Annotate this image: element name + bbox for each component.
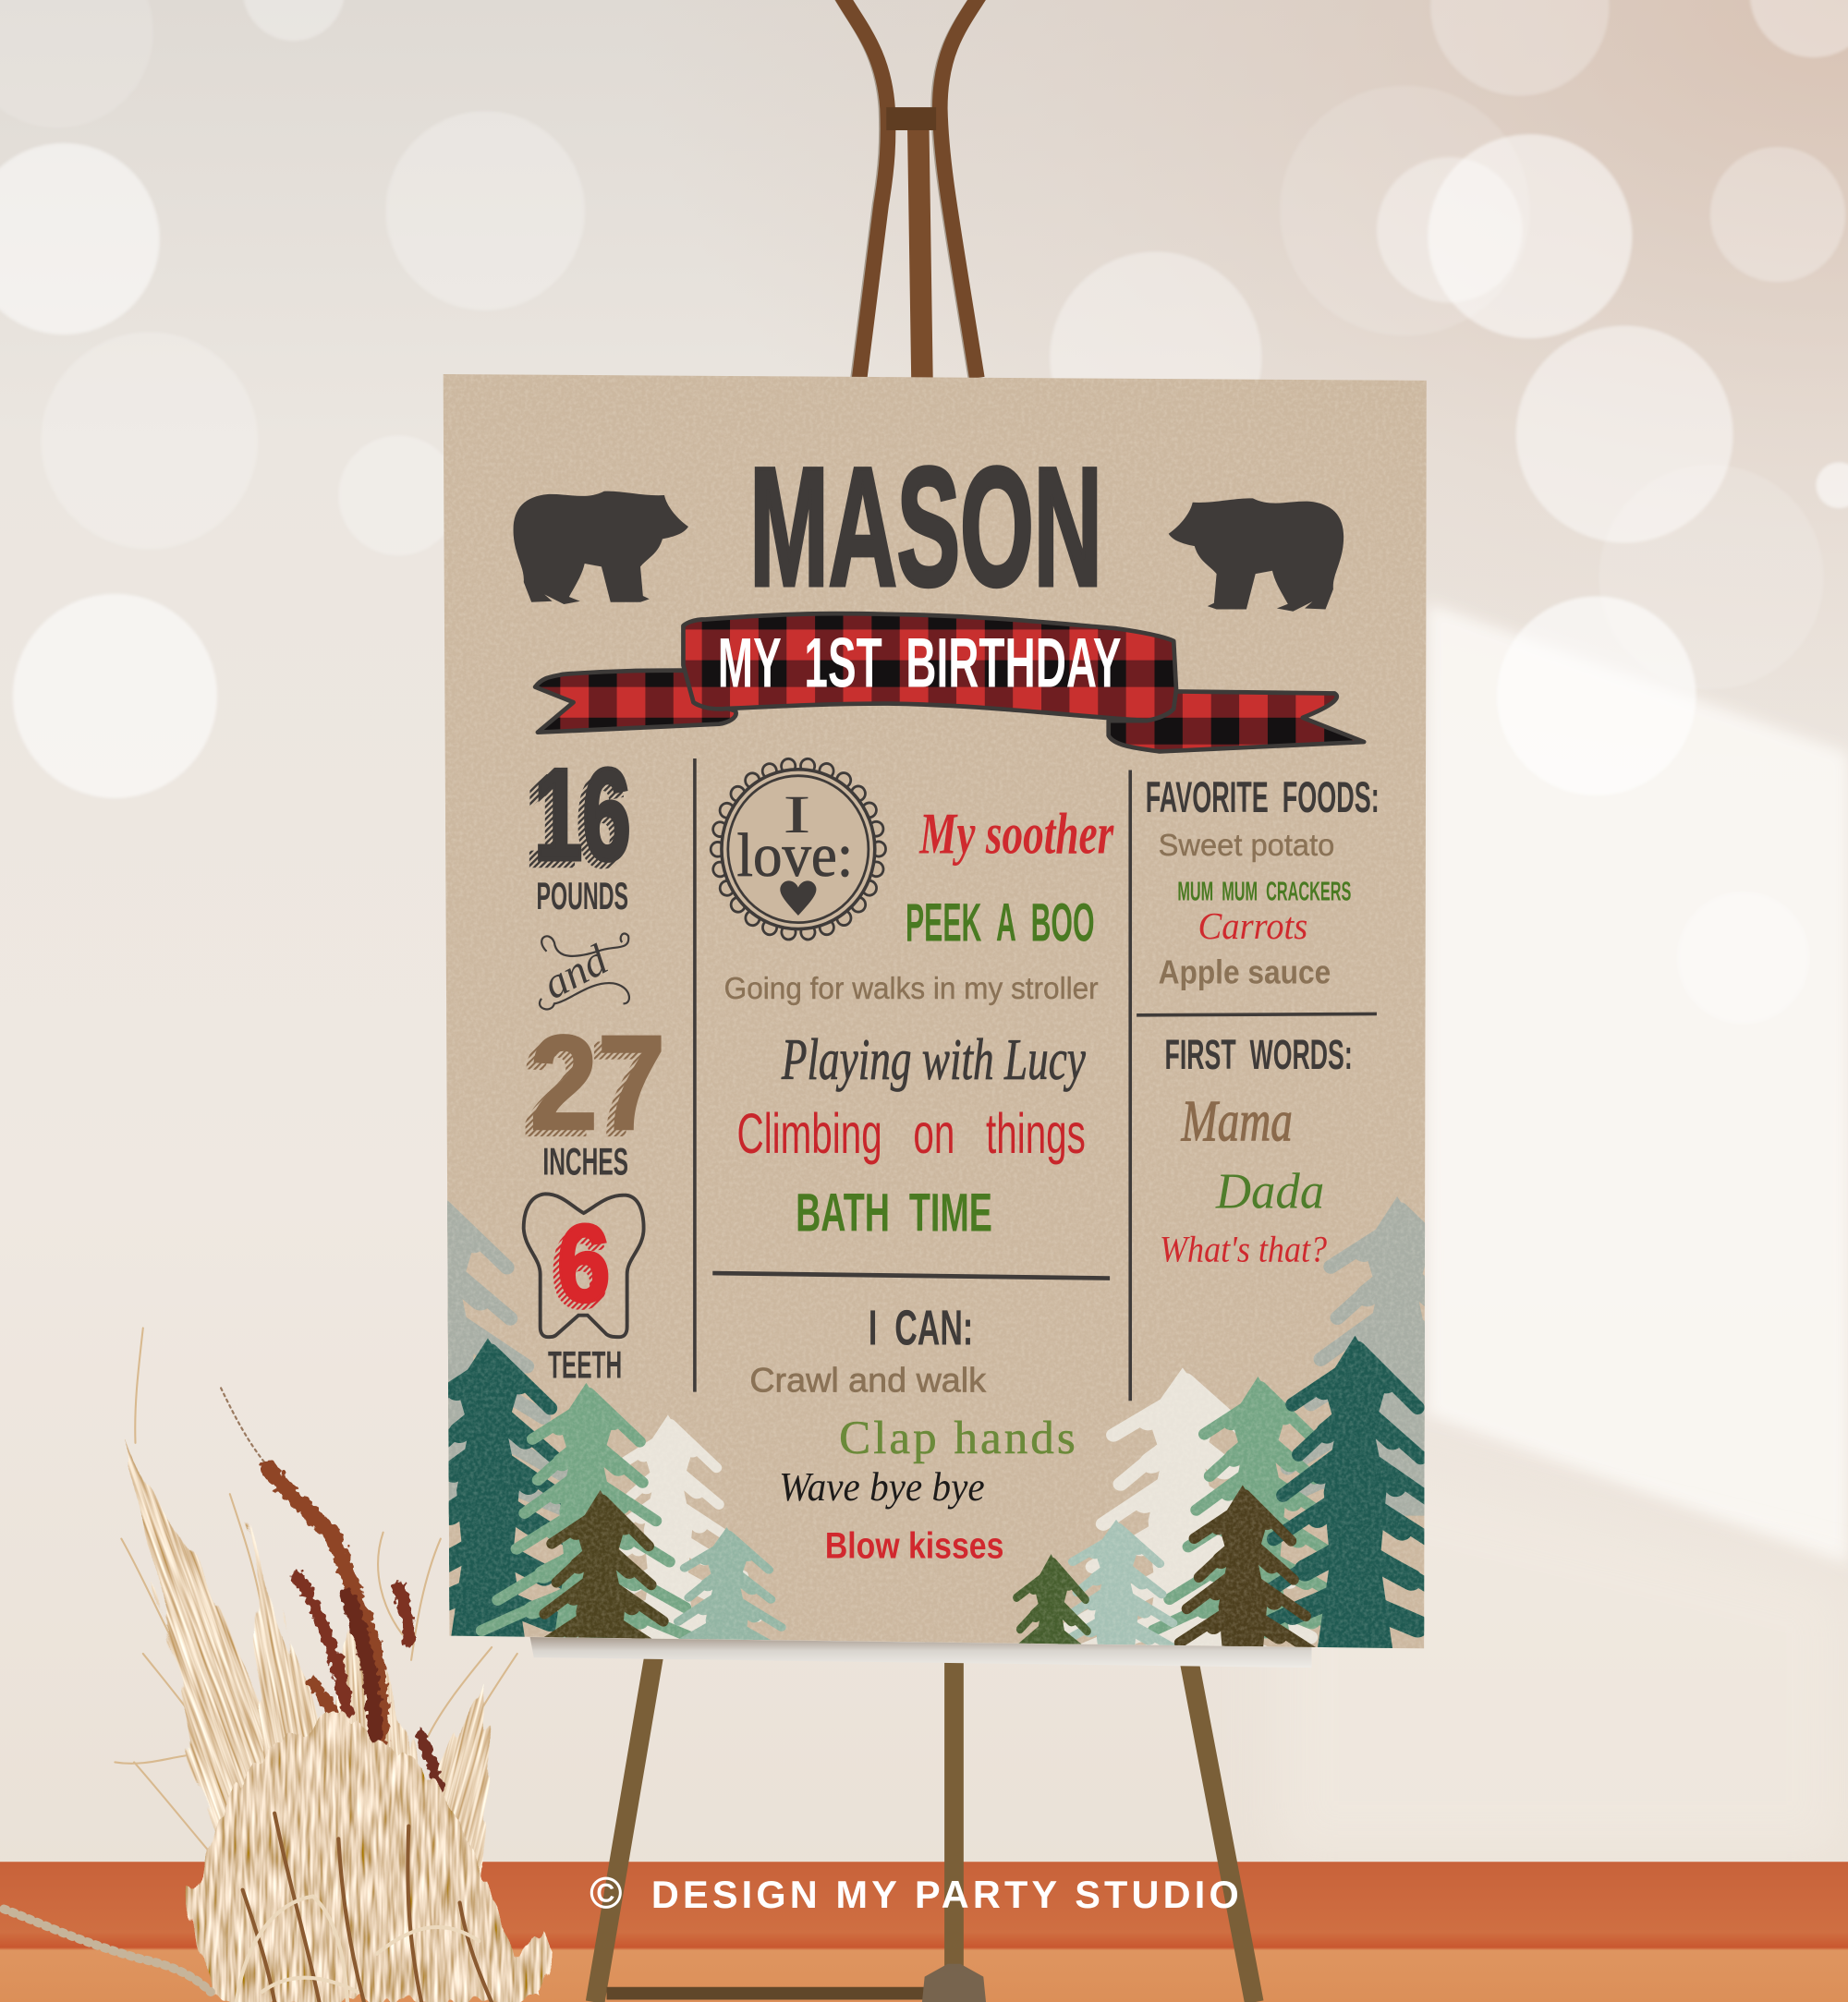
rust main spike <box>268 1469 381 1768</box>
pink glow on upper right wall <box>638 0 1848 792</box>
name title: MASON <box>749 432 1102 621</box>
bath time: BATH TIME <box>796 1183 992 1243</box>
curled leaves <box>237 1897 479 2002</box>
badge word love: love: <box>737 822 853 890</box>
teeth number: 6 <box>557 1202 611 1325</box>
dried plant arrangement <box>4 1328 557 2002</box>
scalloped edge dark <box>718 766 879 933</box>
weight number hatch shadow: 16 <box>525 747 627 893</box>
easel <box>595 0 1254 2002</box>
watermark <box>590 1868 1239 1917</box>
base seed cluster <box>191 1711 537 2002</box>
first words heading: FIRST WORDS: <box>1165 1031 1353 1078</box>
ribbon right tail <box>1109 691 1364 751</box>
going for walks: Going for walks in my stroller <box>724 972 1099 1006</box>
stats column <box>522 741 665 1386</box>
mum mum crackers: MUM MUM CRACKERS <box>1177 877 1351 906</box>
dark teal pine right <box>1233 1336 1480 1648</box>
first words section <box>1160 1031 1353 1270</box>
height number: 27 <box>530 1008 665 1158</box>
plant base mass <box>4 1711 557 2002</box>
tall left plume <box>67 1415 361 1949</box>
left sprig <box>4 1909 211 1992</box>
grey pine right <box>1268 1196 1530 1516</box>
easel bracket <box>886 107 936 130</box>
rust second spike <box>298 1577 347 1711</box>
I can section <box>749 1300 1076 1566</box>
pale pine right <box>1031 1520 1203 1711</box>
teeth number hatch shadow: 6 <box>551 1208 609 1331</box>
inches label: INCHES <box>542 1140 628 1183</box>
tooth outline <box>524 1194 644 1337</box>
pampas plumes <box>67 1415 528 1949</box>
poster board <box>444 374 1427 1648</box>
rust small spike top right <box>398 1587 408 1641</box>
sweet potato: Sweet potato <box>1159 829 1334 863</box>
easel shelf <box>530 1637 1311 1668</box>
column dividers <box>695 758 1130 1401</box>
green pine right <box>1153 1377 1366 1638</box>
easel foot block <box>922 1964 986 2002</box>
weight number: 16 <box>534 741 631 887</box>
centre plume <box>295 1581 441 1932</box>
and text: and <box>535 936 615 1009</box>
foods heading: FAVORITE FOODS: <box>1146 772 1380 821</box>
pale pine left <box>674 1527 786 1641</box>
grey pine left <box>447 1201 568 1515</box>
crawl and walk: Crawl and walk <box>749 1361 986 1400</box>
dada: Dada <box>1215 1163 1324 1219</box>
fine grass blades <box>115 1328 517 1902</box>
section rule: first words <box>1137 1013 1377 1015</box>
rust thin tip <box>221 1388 264 1462</box>
floor <box>0 1862 1848 2002</box>
blow kisses: Blow kisses <box>825 1525 1003 1566</box>
pounds label: POUNDS <box>537 874 628 917</box>
white pine left <box>619 1415 761 1640</box>
bokeh lights <box>0 0 1848 1025</box>
section rule: I can <box>712 1273 1110 1279</box>
paper texture <box>434 364 1443 1660</box>
clap hands: Clap hands <box>839 1412 1076 1464</box>
brown pine left <box>539 1490 669 1639</box>
I can heading: I CAN: <box>869 1300 973 1355</box>
rust seed heads <box>221 1388 438 1815</box>
side seed ball <box>501 1931 557 2002</box>
rust right spike <box>421 1737 438 1815</box>
badge inner ring <box>728 776 869 923</box>
wave bye bye: Wave bye bye <box>779 1464 985 1510</box>
easel upper arms <box>840 0 981 378</box>
badge outer ring <box>722 770 875 929</box>
sunlight beam on wall <box>1428 602 1848 1564</box>
green pine left <box>481 1383 694 1638</box>
teeth label: TEETH <box>548 1342 622 1386</box>
trees: left group <box>447 1201 786 1641</box>
easel arm highlights <box>833 0 973 378</box>
right bear <box>1169 498 1343 612</box>
easel cross bar <box>607 1989 930 1998</box>
I love list <box>724 800 1114 1243</box>
dark stems in base <box>243 1814 492 2002</box>
small green pine <box>984 1554 1120 1752</box>
rust low spike <box>313 1683 342 1743</box>
easel centre post <box>918 127 922 378</box>
scalloped edge inner <box>718 766 879 933</box>
dark teal pine left <box>448 1338 610 1638</box>
studio name: DESIGN MY PARTY STUDIO <box>651 1873 1239 1916</box>
trees: right group <box>984 1196 1530 1752</box>
easel lower legs <box>595 1656 1254 2002</box>
my soother: My soother <box>918 800 1114 866</box>
playing with lucy: Playing with Lucy <box>781 1026 1086 1092</box>
apple sauce: Apple sauce <box>1159 952 1331 990</box>
rust dark core <box>347 1596 375 1781</box>
ribbon left tail <box>535 671 736 733</box>
what's that: What's that? <box>1160 1229 1327 1270</box>
left bear <box>514 491 688 604</box>
copyright symbol: © <box>590 1868 622 1917</box>
carrots: Carrots <box>1198 904 1307 947</box>
kraft paper <box>434 364 1443 1660</box>
right plume <box>377 1669 528 1939</box>
plaid ribbon banner <box>535 613 1364 751</box>
brown pine right <box>1148 1485 1340 1728</box>
badge heart <box>780 880 816 916</box>
height number hatch shadow: 27 <box>522 1014 658 1164</box>
peek a boo: PEEK A BOO <box>906 893 1095 953</box>
badge word I: I <box>783 784 811 844</box>
middle plume <box>202 1511 377 1937</box>
ribbon centre <box>683 613 1176 721</box>
lower right light wash <box>1277 1443 1848 1862</box>
mama: Mama <box>1181 1087 1293 1153</box>
white pine right <box>1048 1367 1320 1674</box>
flourish strokes <box>540 934 629 1009</box>
rust spikes <box>268 1469 438 1815</box>
climbing on things: Climbing on things <box>737 1102 1086 1165</box>
ribbon text: MY 1ST BIRTHDAY <box>718 625 1122 703</box>
and flourish <box>535 934 629 1009</box>
favorite foods section <box>1146 772 1380 990</box>
I love badge <box>718 766 879 933</box>
